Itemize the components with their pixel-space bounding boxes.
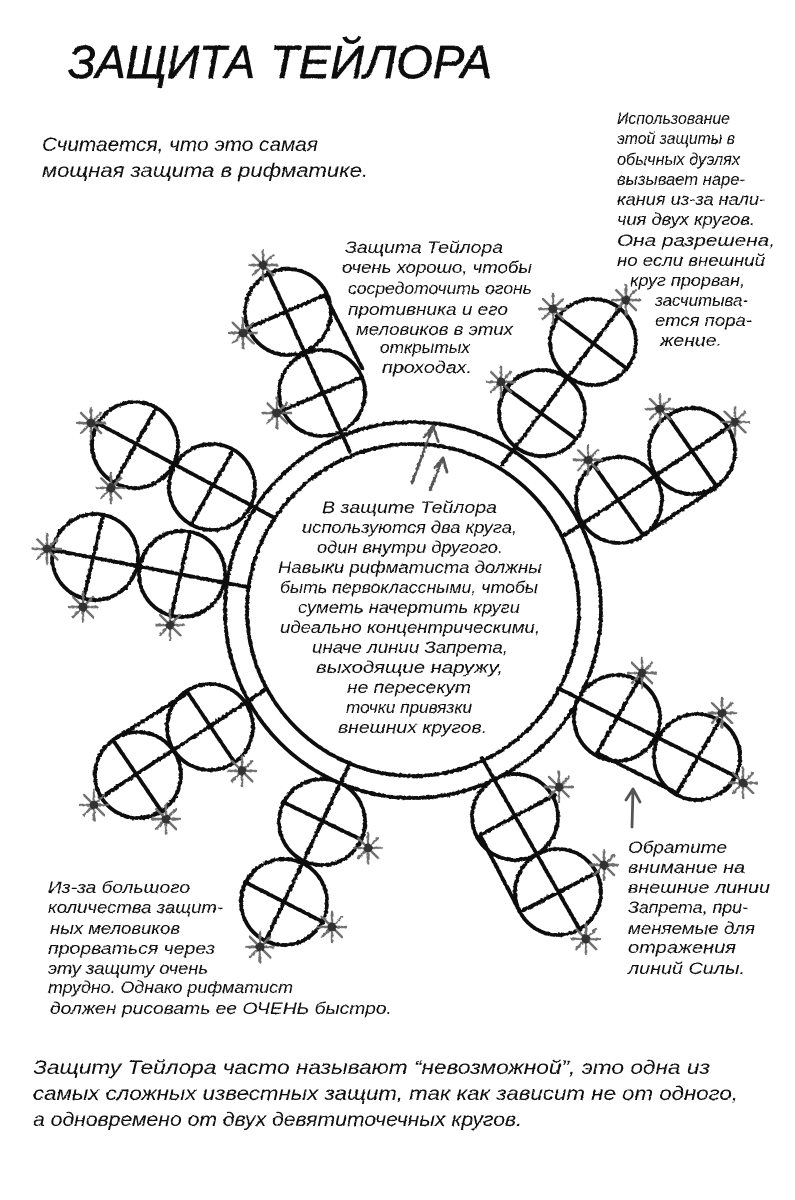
arrow to outer ban lines bbox=[626, 789, 640, 827]
intro text: Считается, что это самая bbox=[42, 135, 318, 156]
central text: используются два круга, bbox=[302, 518, 517, 537]
central text: идеально концентрическими, bbox=[280, 618, 540, 637]
note: chalklings: Из-за большого bbox=[48, 878, 190, 897]
circle pair: bottom right bbox=[472, 758, 618, 954]
central double ring bbox=[225, 422, 601, 798]
circle pair: top left bbox=[229, 250, 365, 452]
intro text: мощная защита в рифматике. bbox=[42, 161, 368, 182]
central text: не пересекут bbox=[347, 678, 471, 697]
circle pair: right lower bbox=[558, 658, 757, 800]
note: outer ban lines: Запрета, при- bbox=[628, 898, 748, 917]
title: ЗАЩИТА bbox=[68, 36, 255, 88]
note: duels: ется пора- bbox=[655, 311, 752, 330]
note: open passages: очень хорошо, чтобы bbox=[342, 258, 533, 277]
title bbox=[68, 35, 492, 88]
note: open passages bbox=[342, 238, 533, 377]
central text: выходящие наружу, bbox=[316, 658, 503, 677]
closing text: самых сложных известных защит, так как зависит не от одного, bbox=[33, 1084, 738, 1105]
note: outer ban lines: Обратите bbox=[628, 838, 727, 857]
title: ТЕЙЛОРА bbox=[270, 35, 492, 88]
note: outer ban lines bbox=[627, 838, 771, 978]
central text: суметь начертить круги bbox=[298, 598, 521, 617]
note: chalklings: прорваться через bbox=[48, 939, 215, 958]
note: duels: круг прорван, bbox=[630, 271, 745, 290]
note: duels: жение. bbox=[659, 331, 722, 350]
note: duels: обычных дуэлях bbox=[617, 150, 740, 169]
circle pair: left middle bbox=[33, 514, 247, 640]
note: open passages: меловиков в этих bbox=[356, 320, 514, 339]
note: duels: кания из-за нали- bbox=[617, 190, 765, 209]
note: outer ban lines: линий Силы. bbox=[627, 959, 745, 978]
circle pair: right upper bbox=[562, 394, 749, 543]
note: open passages: Защита Тейлора bbox=[345, 238, 503, 257]
intro text bbox=[42, 135, 368, 182]
central text: быть первоклассными, чтобы bbox=[280, 578, 539, 597]
circle pair: left upper bbox=[77, 402, 273, 530]
central text: внешних кругов. bbox=[338, 718, 487, 737]
note: chalklings: количества защит- bbox=[48, 898, 223, 917]
note: duels: засчитыва- bbox=[654, 291, 748, 310]
note: chalklings: должен рисовать ее ОЧЕНЬ быстро. bbox=[50, 999, 392, 1018]
note: outer ban lines: отражения bbox=[628, 938, 736, 957]
note: outer ban lines: внимание на bbox=[628, 858, 745, 877]
central text: иначе линии Запрета, bbox=[312, 638, 508, 657]
note: duels: но если внешний bbox=[617, 251, 766, 270]
note: open passages: проходах. bbox=[382, 358, 472, 377]
note: chalklings: эту защиту очень bbox=[48, 959, 208, 978]
note: open passages: сосредоточить огонь bbox=[348, 279, 532, 298]
note: duels: Использование bbox=[617, 109, 730, 128]
note: duels bbox=[617, 109, 775, 350]
note: open passages: противника и его bbox=[348, 300, 508, 319]
note: open passages: открытых bbox=[380, 338, 471, 357]
circle pair: top right bbox=[487, 285, 640, 465]
note: duels: этой защиты в bbox=[617, 129, 735, 148]
note: duels: чия двух кругов. bbox=[617, 210, 755, 229]
central text: В защите Тейлора bbox=[322, 498, 497, 517]
central text bbox=[278, 498, 543, 737]
circle pair: bottom left inner bbox=[241, 763, 382, 962]
central text: один внутри другого. bbox=[317, 538, 503, 557]
closing text bbox=[33, 1058, 738, 1131]
note: chalklings bbox=[48, 878, 392, 1018]
circle pair: lower left bbox=[80, 684, 265, 834]
note: outer ban lines: меняемые для bbox=[628, 919, 755, 938]
note: duels: вызывает наре- bbox=[617, 170, 745, 189]
closing text: Защиту Тейлора часто называют “невозможной”, это одна из bbox=[33, 1058, 710, 1079]
note: duels: Она разрешена, bbox=[617, 231, 775, 250]
central text: Навыки рифматиста должны bbox=[278, 558, 543, 577]
arrows to open passages bbox=[412, 426, 447, 490]
central text: точки привязки bbox=[346, 698, 473, 717]
note: chalklings: трудно. Однако рифматист bbox=[48, 978, 293, 997]
closing text: а одновремено от двух девятиточечных кругов. bbox=[33, 1110, 522, 1131]
note: outer ban lines: внешние линии bbox=[628, 878, 771, 897]
note: chalklings: ных меловиков bbox=[50, 919, 180, 938]
